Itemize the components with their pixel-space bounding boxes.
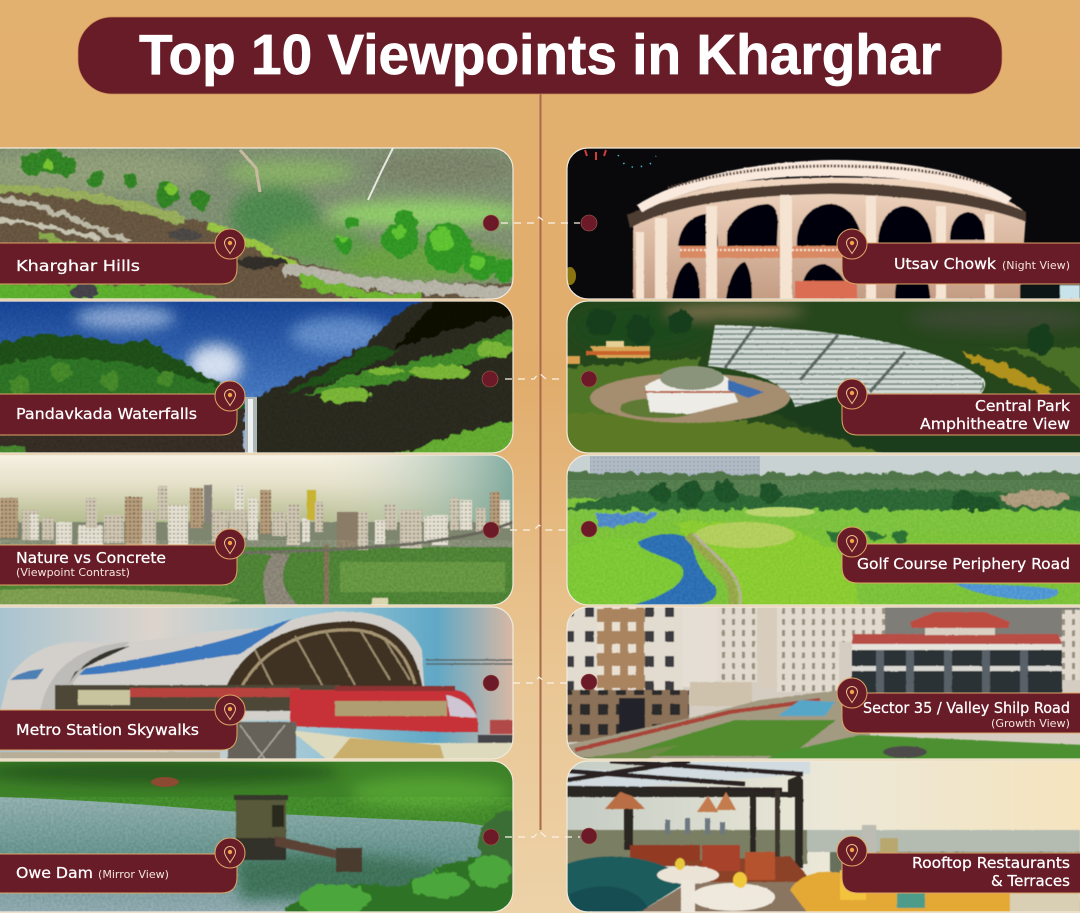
label: Sector 35 / Valley Shilp Road: (Growth View)	[991, 718, 1070, 730]
label: Sector 35 / Valley Shilp Road	[837, 678, 1080, 733]
photo frame	[567, 301, 1080, 453]
label: Nature vs Concrete: (Viewpoint Contrast)	[16, 567, 130, 579]
photo frame	[0, 301, 513, 453]
label: Nature vs Concrete	[0, 529, 245, 585]
label: Owe Dam: Owe Dam	[16, 864, 93, 882]
connector dot	[581, 215, 597, 231]
photo frame	[567, 148, 1080, 299]
label: Rooftop Restaurants and Terraces: Rooftop Restaurants	[912, 854, 1070, 872]
photo: city skyline and greenery	[0, 455, 513, 610]
label: Golf Course Periphery Road	[837, 527, 1080, 583]
panel: Nature vs Concrete	[0, 455, 513, 610]
connector dot	[581, 521, 597, 537]
photo frame	[567, 607, 1080, 759]
photo frame	[0, 607, 513, 759]
panel: Golf Course Periphery Road	[560, 455, 1080, 610]
photo frame	[567, 455, 1080, 605]
label: Golf Course Periphery Road: Golf Course Periphery Road	[857, 555, 1070, 573]
panel: Utsav Chowk	[564, 148, 1080, 299]
central timeline line	[540, 94, 542, 830]
panel: Sector 35 / Valley Shilp Road	[567, 607, 1080, 762]
connector dot	[581, 371, 597, 387]
label: Utsav Chowk	[837, 229, 1080, 284]
icon: map pin	[837, 229, 867, 259]
label: Metro Station Skywalks	[0, 695, 245, 750]
photo: illuminated rotunda at night	[564, 148, 1080, 299]
label: Rooftop Restaurants and Terraces	[837, 836, 1080, 893]
photo frame	[0, 455, 513, 605]
photo: metro station and red train	[0, 607, 513, 762]
title text: Top 10 Viewpoints in Kharghar	[139, 23, 941, 87]
label: Pandavkada Waterfalls: Pandavkada Waterfalls	[16, 405, 197, 423]
connector: dashed lines linking the left and right dots	[501, 217, 580, 837]
connector dot	[581, 828, 597, 844]
panel: Rooftop Restaurants and Terraces	[567, 761, 1080, 913]
label: Utsav Chowk: (Night View)	[1002, 260, 1070, 272]
label: Kharghar Hills: Kharghar Hills	[16, 257, 140, 275]
icon: map pin	[837, 836, 867, 866]
icon: map pin	[215, 381, 245, 411]
photo: golf course with blue river	[560, 455, 1080, 610]
label: Kharghar Hills	[0, 229, 245, 284]
label: Owe Dam	[0, 838, 245, 893]
photo frame	[567, 761, 1080, 912]
photo: waterfall and cliffs	[0, 296, 520, 460]
connector dot	[581, 674, 597, 690]
label: Metro Station Skywalks: Metro Station Skywalks	[16, 721, 199, 739]
label: Central Park Amphitheatre View: Central Park	[975, 397, 1070, 415]
photo: rooftop terrace with sea view	[567, 761, 1080, 913]
photo frame	[0, 148, 513, 299]
photo: high-rise towers and clubhouse	[567, 607, 1080, 762]
panel: Pandavkada Waterfalls	[0, 296, 520, 460]
label: Utsav Chowk: Utsav Chowk	[894, 255, 996, 273]
icon: map pin	[215, 838, 245, 868]
connector dot	[482, 371, 498, 387]
label: Sector 35 / Valley Shilp Road: Sector 35 / Valley Shilp Road	[863, 699, 1070, 717]
label: Pandavkada Waterfalls	[0, 381, 245, 435]
title banner	[78, 17, 1002, 94]
label: Rooftop Restaurants and Terraces: & Terraces	[991, 872, 1070, 890]
connector dot	[483, 215, 499, 231]
panel: Kharghar Hills	[0, 147, 525, 305]
panel: Owe Dam	[0, 759, 520, 913]
icon: map pin	[837, 379, 867, 409]
photo: green hills	[0, 147, 525, 305]
panel: Metro Station Skywalks	[0, 607, 513, 762]
label: Central Park Amphitheatre View: Amphitheatre View	[920, 415, 1070, 433]
icon: map pin	[837, 527, 867, 557]
label: Central Park Amphitheatre View	[837, 379, 1080, 435]
icon: map pin	[215, 229, 245, 259]
icon: map pin	[837, 678, 867, 708]
icon: map pin	[215, 695, 245, 725]
panel: Central Park Amphitheatre	[560, 301, 1080, 460]
icon: map pin	[215, 529, 245, 559]
label: Owe Dam: (Mirror View)	[98, 869, 169, 881]
photo: lake with old dam structure	[0, 759, 520, 913]
label: Nature vs Concrete: Nature vs Concrete	[16, 549, 166, 567]
photo frame	[0, 761, 513, 912]
connector dot	[483, 522, 499, 538]
photo: amphitheatre seen from above	[560, 301, 1080, 460]
connector dot	[483, 675, 499, 691]
connector dot	[483, 829, 499, 845]
